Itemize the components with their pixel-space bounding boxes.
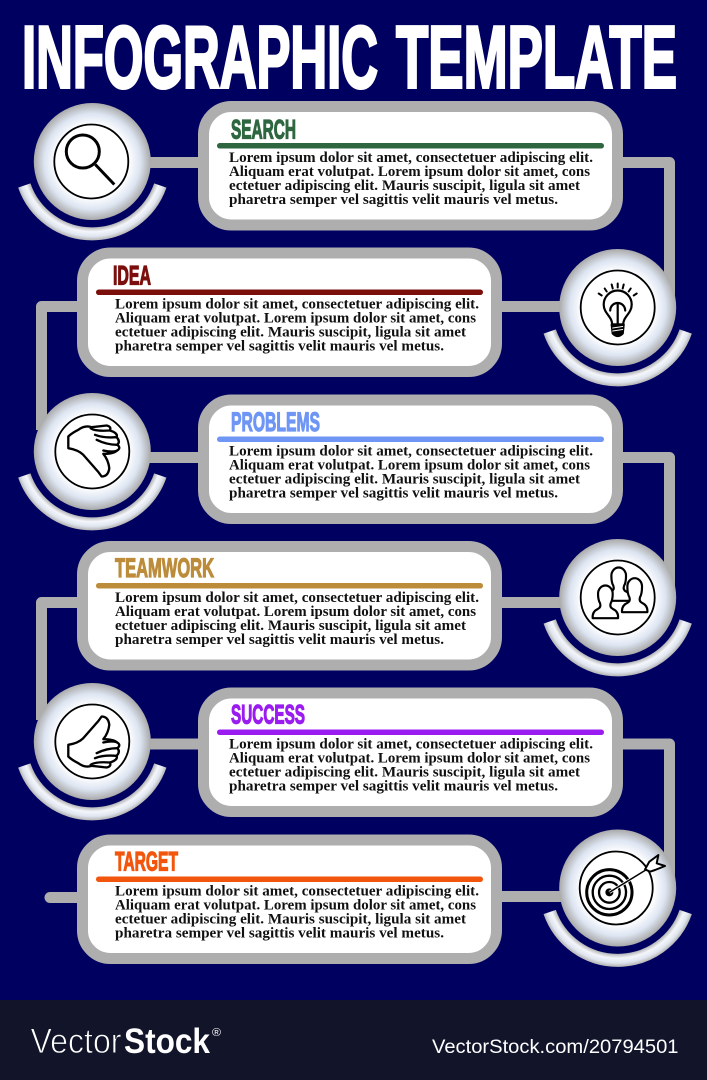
body text: teamwork: Aliquam erat volutpat. Lorem ipsum dolor sit amet, cons bbox=[115, 604, 476, 620]
body text: idea: ectetuer adipiscing elit. Mauris suscipit, ligula sit amet bbox=[115, 324, 466, 340]
icon: target badge bbox=[550, 830, 686, 960]
icon: light bulb bbox=[599, 284, 637, 336]
panel: teamwork bbox=[82, 546, 496, 665]
icon: thumbs up bbox=[68, 717, 119, 767]
body text: search bbox=[229, 150, 593, 208]
body text: teamwork bbox=[115, 590, 479, 648]
panel: problems bbox=[204, 400, 618, 518]
body text: teamwork: Lorem ipsum dolor sit amet, consectetuer adipiscing elit. bbox=[115, 590, 479, 606]
heading: problems: PROBLEMS bbox=[231, 407, 320, 437]
title: INFOGRAPHIC bbox=[22, 8, 378, 106]
icon: magnifying glass bbox=[66, 135, 114, 184]
rule: idea bbox=[96, 290, 483, 295]
body text: success: Aliquam erat volutpat. Lorem ipsum dolor sit amet, cons bbox=[229, 750, 590, 766]
footer logo: Stock bbox=[124, 1022, 210, 1061]
footer bar bbox=[0, 1000, 707, 1080]
rule: problems bbox=[217, 436, 604, 442]
body text: target: Lorem ipsum dolor sit amet, consectetuer adipiscing elit. bbox=[115, 884, 479, 900]
body text: idea: Lorem ipsum dolor sit amet, consectetuer adipiscing elit. bbox=[115, 296, 479, 312]
rule: search bbox=[217, 143, 604, 148]
icon: group of people bbox=[593, 568, 647, 618]
body text: problems: Aliquam erat volutpat. Lorem ipsum dolor sit amet, cons bbox=[229, 458, 590, 474]
footer logo: ® bbox=[212, 1027, 221, 1039]
body text: teamwork: ectetuer adipiscing elit. Mauris suscipit, ligula sit amet bbox=[115, 618, 466, 634]
body text: teamwork: pharetra semper vel sagittis velit mauris vel metus. bbox=[115, 632, 444, 648]
body text: success: ectetuer adipiscing elit. Mauris suscipit, ligula sit amet bbox=[229, 764, 580, 780]
body text: target bbox=[115, 884, 479, 942]
panel: success bbox=[204, 693, 618, 812]
heading: success: SUCCESS bbox=[231, 700, 305, 730]
icon: idea badge bbox=[550, 249, 686, 380]
icon: search badge bbox=[24, 103, 160, 234]
body text: problems: Lorem ipsum dolor sit amet, consectetuer adipiscing elit. bbox=[229, 444, 593, 460]
icon: teamwork badge bbox=[550, 539, 686, 670]
icon: thumbs down bbox=[68, 426, 119, 476]
body text: target: pharetra semper vel sagittis velit mauris vel metus. bbox=[115, 926, 444, 942]
heading: search: SEARCH bbox=[231, 114, 296, 144]
rule: success bbox=[217, 730, 604, 735]
body text: problems bbox=[229, 444, 593, 502]
icon: success badge bbox=[24, 683, 160, 814]
icon: problems badge bbox=[24, 393, 160, 524]
heading: idea: IDEA bbox=[113, 260, 151, 290]
heading: teamwork: TEAMWORK bbox=[115, 553, 214, 583]
body text: search: pharetra semper vel sagittis velit mauris vel metus. bbox=[229, 192, 558, 208]
connectors bbox=[42, 162, 670, 898]
panel: target bbox=[82, 840, 496, 958]
body text: idea: pharetra semper vel sagittis velit mauris vel metus. bbox=[115, 338, 444, 354]
body text: target: Aliquam erat volutpat. Lorem ipsum dolor sit amet, cons bbox=[115, 898, 476, 914]
body text: success: Lorem ipsum dolor sit amet, consectetuer adipiscing elit. bbox=[229, 736, 593, 752]
icon: bullseye and arrow bbox=[587, 855, 665, 915]
body text: search: Aliquam erat volutpat. Lorem ipsum dolor sit amet, cons bbox=[229, 164, 590, 180]
body text: target: ectetuer adipiscing elit. Mauris suscipit, ligula sit amet bbox=[115, 912, 466, 928]
rule: target bbox=[96, 876, 483, 882]
footer logo bbox=[30, 1022, 221, 1061]
body text: search: Lorem ipsum dolor sit amet, consectetuer adipiscing elit. bbox=[229, 150, 593, 166]
panel: idea bbox=[82, 253, 496, 372]
body text: success: pharetra semper vel sagittis velit mauris vel metus. bbox=[229, 778, 558, 794]
body text: idea bbox=[115, 296, 479, 354]
body text: problems: pharetra semper vel sagittis velit mauris vel metus. bbox=[229, 486, 558, 502]
rule: teamwork bbox=[96, 583, 483, 588]
body text: success bbox=[229, 736, 593, 794]
footer logo: Vector bbox=[30, 1022, 122, 1061]
body text: idea: Aliquam erat volutpat. Lorem ipsum dolor sit amet, cons bbox=[115, 310, 476, 326]
panel: search bbox=[204, 106, 618, 225]
body text: problems: ectetuer adipiscing elit. Mauris suscipit, ligula sit amet bbox=[229, 472, 580, 488]
heading: target: TARGET bbox=[115, 846, 178, 876]
footer image id: VectorStock.com/20794501 bbox=[432, 1036, 678, 1058]
body text: search: ectetuer adipiscing elit. Mauris suscipit, ligula sit amet bbox=[229, 178, 580, 194]
